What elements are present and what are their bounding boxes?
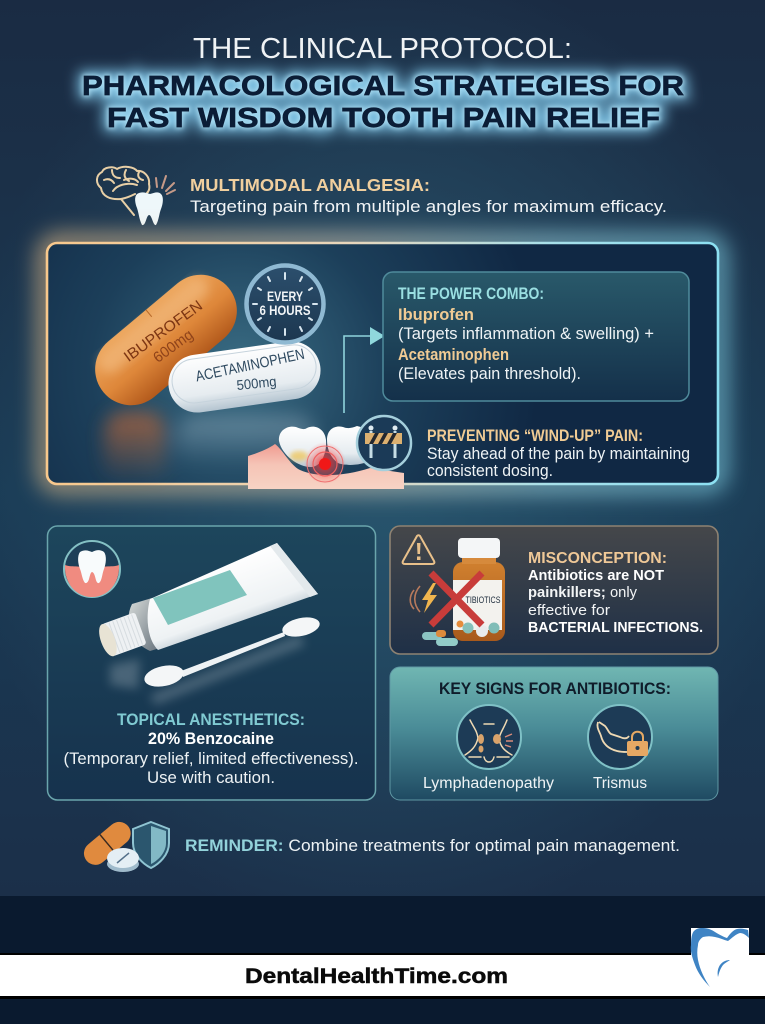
topical anesthetics text — [64, 711, 358, 787]
ibuprofen pill: 600mg — [150, 326, 197, 366]
misconception text — [528, 550, 703, 636]
sign labels: Lymphadenopathy — [423, 775, 554, 792]
panel: main power combo — [47, 243, 718, 489]
title: PHARMACOLOGICAL STRATEGIES FOR — [82, 70, 684, 101]
preventing wind-up pain text: PREVENTING “WIND-UP” PAIN: — [427, 427, 643, 445]
clock: every 6 hours — [246, 266, 324, 342]
clock: every 6 hours: EVERY — [267, 288, 303, 304]
callout: the power combo: (Targets inflammation & swelling) + — [398, 325, 654, 343]
icon: lightning pain — [410, 583, 437, 613]
title: FAST WISDOM TOOTH PAIN RELIEF — [107, 102, 660, 133]
ibuprofen pill: IBUPROFEN — [121, 297, 206, 366]
panel: key signs for antibiotics: Trismus — [593, 775, 647, 792]
topical anesthetics text: (Temporary relief, limited effectiveness). — [64, 750, 358, 768]
icon: pills and shield — [79, 817, 169, 872]
acetaminophen pill — [165, 338, 324, 416]
callout: the power combo: (Elevates pain threshold). — [398, 365, 581, 383]
antibiotics bottle — [422, 538, 505, 646]
ibuprofen pill — [80, 260, 252, 420]
multimodal analgesia text: MULTIMODAL ANALGESIA: — [190, 175, 430, 195]
misconception text: Antibiotics are NOT — [528, 567, 664, 584]
acetaminophen pill: 500mg — [236, 373, 277, 393]
title: THE CLINICAL PROTOCOL: — [193, 33, 572, 65]
icon: brain and tooth — [97, 167, 175, 225]
icon: warning triangle — [403, 535, 434, 564]
callout: the power combo: Acetaminophen — [398, 346, 509, 364]
preventing wind-up pain text: consistent dosing. — [427, 462, 553, 480]
callout: the power combo: THE POWER COMBO: — [398, 285, 544, 303]
cotton swab — [142, 614, 321, 690]
misconception text: BACTERIAL INFECTIONS. — [528, 619, 703, 636]
multimodal analgesia text: Targeting pain from multiple angles for maximum efficacy. — [190, 197, 667, 216]
multimodal analgesia text — [190, 175, 667, 216]
callout: the power combo — [383, 272, 689, 401]
icon: trismus — [588, 705, 652, 769]
tube of benzocaine — [96, 543, 318, 658]
misconception text: effective for — [528, 602, 610, 619]
title — [82, 33, 684, 133]
clock: every 6 hours: 6 HOURS — [260, 302, 310, 318]
icon: lymphadenopathy — [457, 705, 521, 769]
antibiotics bottle: TIBIOTICS — [466, 595, 500, 605]
footer band: DentalHealthTime.com — [245, 965, 508, 988]
logo: tooth — [691, 928, 749, 987]
key signs heading: KEY SIGNS FOR ANTIBIOTICS: — [439, 680, 671, 698]
icon: roadblock barrier — [357, 416, 411, 470]
topical anesthetics text: 20% Benzocaine — [148, 730, 274, 748]
misconception text: painkillers; only — [528, 584, 637, 601]
callout: the power combo: Ibuprofen — [398, 306, 474, 324]
tube and swab reflections — [110, 635, 305, 705]
acetaminophen pill: ACETAMINOPHEN — [194, 346, 306, 385]
panel: key signs for antibiotics — [390, 667, 718, 800]
preventing wind-up pain text — [427, 427, 690, 480]
icon: tooth in gum — [64, 541, 120, 597]
panel: topical anesthetics — [48, 526, 376, 800]
topical anesthetics text: Use with caution. — [147, 769, 275, 787]
misconception text: MISCONCEPTION: — [528, 550, 667, 567]
title: PHARMACOLOGICAL STRATEGIES FOR — [82, 70, 684, 101]
title: FAST WISDOM TOOTH PAIN RELIEF — [107, 102, 660, 133]
title: FAST WISDOM TOOTH PAIN RELIEF — [107, 102, 660, 133]
pill reflections — [104, 412, 316, 484]
arrow to power combo — [344, 327, 385, 413]
reminder text: REMINDER: Combine treatments for optimal pain management. — [185, 836, 680, 855]
title: PHARMACOLOGICAL STRATEGIES FOR — [82, 70, 684, 101]
panel: misconception — [390, 526, 718, 654]
preventing wind-up pain text: Stay ahead of the pain by maintaining — [427, 445, 690, 463]
topical anesthetics text: TOPICAL ANESTHETICS: — [117, 711, 305, 729]
footer band — [0, 953, 765, 999]
icon: inflamed gum and teeth — [248, 426, 404, 489]
